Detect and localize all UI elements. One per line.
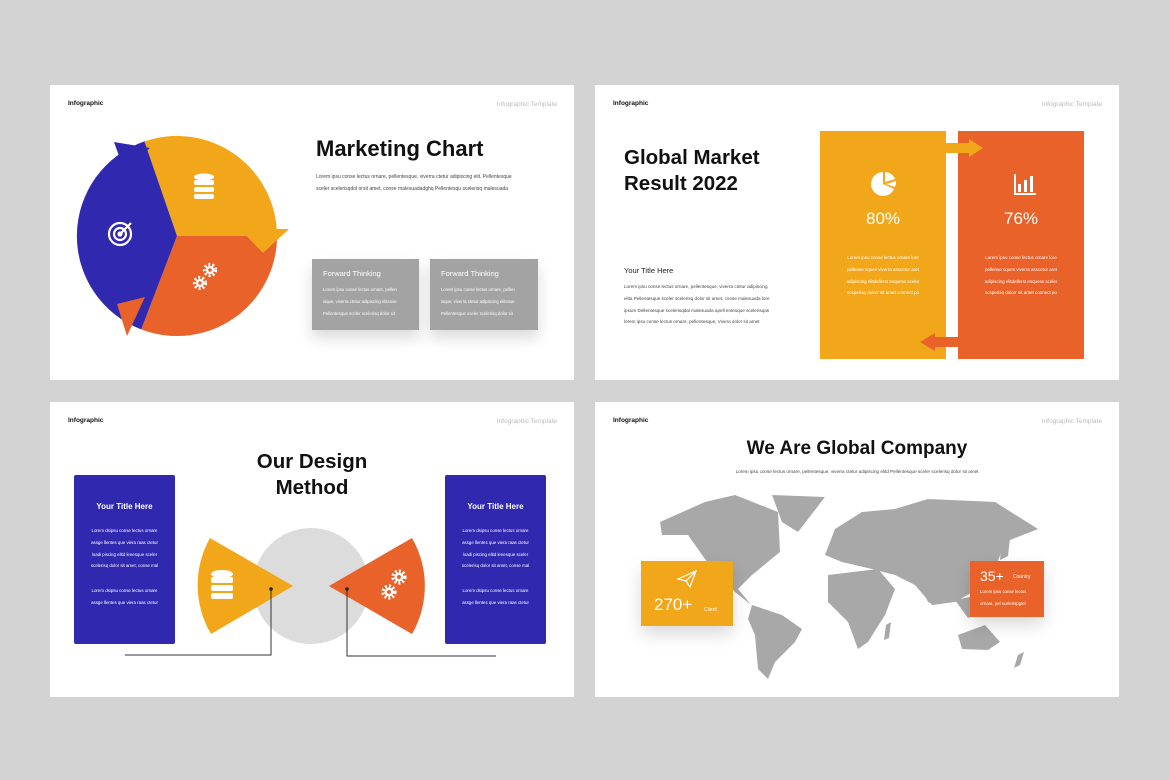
orange column	[958, 131, 1084, 359]
text yellow column: scsperisq dolorr sit amet connect po	[847, 290, 919, 295]
connector lines	[125, 589, 496, 656]
icon: pie	[871, 172, 896, 196]
card: left: Lorem dsipsu conse lectus ornare	[92, 588, 157, 593]
body text: ipsum Dellentesque scelerisqdal malesuada apell entesque scelerisqas	[624, 308, 769, 313]
card: right: scelerisq dolor sit amet, conse mal	[462, 563, 529, 568]
card: forward thinking 2: isque, viverra ctetur adipiscing elitesse	[441, 299, 515, 304]
card: forward thinking 1	[312, 259, 419, 330]
subtitle: Your Title Here	[624, 266, 673, 275]
panel: marketing chart: Infographic Template	[497, 101, 557, 108]
icon: bar chart	[1014, 174, 1036, 195]
cycle chart	[77, 136, 289, 336]
card: right: loadi piscing elitd lenesque sceler	[463, 552, 528, 557]
yellow sector	[198, 538, 293, 634]
text orange column: Lorem ipsu conse lectus ornare lore	[985, 255, 1057, 260]
card: right: Your Title Here	[467, 502, 524, 511]
card: forward thinking 2: Forward Thinking	[441, 269, 499, 278]
text orange column	[984, 255, 1058, 295]
card: left: Lorem dsipsu conse lectus ornare	[92, 528, 157, 533]
card: left: scelerisq dolor sit amet, conse mal	[91, 563, 158, 568]
card: right: assge llentes que viera raas ctetur	[462, 540, 529, 545]
panel: global company	[595, 402, 1119, 697]
title: Method	[276, 476, 348, 499]
card: forward thinking 1: Forward Thinking	[323, 269, 381, 278]
body text	[624, 284, 770, 324]
stat box: clients	[641, 561, 733, 626]
panel: global company: Infographic Template	[1042, 418, 1102, 425]
arrow left	[920, 333, 958, 351]
icon: gears	[383, 571, 405, 598]
body text: Lorem ipsu conse lectus ornare, pellentesque, viverra ctetur adipiscing	[624, 284, 768, 289]
card: forward thinking 1: Pellentesque sceler scelerisq dolor sit	[323, 311, 395, 316]
title: We Are Global Company	[747, 438, 967, 459]
text orange column: pellense sques viverra asscetur aret	[985, 267, 1057, 272]
card: forward thinking 2	[430, 259, 538, 330]
card: left: Your Title Here	[96, 502, 153, 511]
card: forward thinking 2: Pellentesque sceler scelerisq dolor sit	[441, 311, 513, 316]
subtitle text: Lorem ipsu conse lectus ornare, pellentesque, viverra ctetur adipiscing elitd Pellentesque sceler scelerisq dolor sit amet	[736, 469, 978, 474]
title: Marketing Chart	[316, 136, 483, 161]
card: right	[445, 475, 546, 644]
card: forward thinking 2: Lorem ipsu conse lectus ornare, pellen	[441, 287, 515, 292]
panel: global market result	[595, 85, 1119, 380]
panel: design method	[50, 402, 574, 697]
stat box: countries	[970, 561, 1044, 617]
gray circle	[253, 528, 369, 644]
header: Infographic	[613, 417, 648, 424]
stat box: clients: Client	[704, 607, 717, 613]
card: forward thinking 1: Lorem ipsu conse lectus ornare, pellen	[323, 287, 397, 292]
text orange column: scsperisq dolorr sit amet connect po	[985, 290, 1057, 295]
panel: marketing chart	[50, 85, 574, 380]
title	[257, 450, 367, 499]
card: left	[74, 475, 175, 644]
card: right: assge llentes que viera raas ctetur	[462, 600, 529, 605]
world map	[660, 495, 1038, 679]
yellow column	[820, 131, 946, 359]
stat box: clients: 270+	[654, 595, 692, 614]
card: left: assge llentes que viera raas ctetur	[91, 540, 158, 545]
icon: paper plane	[676, 570, 697, 588]
header: Infographic	[68, 100, 103, 107]
card: right: Lorem dsipsu conse lectus ornare	[463, 528, 528, 533]
arrow right	[946, 139, 983, 157]
body text: elita Pellentesque sceler scelerisq dolor sit amet, conse malesuada lore	[624, 296, 770, 301]
card: left: loadi piscing elitd lenesque sceler	[92, 552, 157, 557]
stat box: countries: 35+	[980, 568, 1004, 584]
header: Infographic	[613, 100, 648, 107]
stat box: countries: ornare, pel scelerispgtel	[980, 601, 1026, 606]
title: Result 2022	[624, 172, 738, 195]
stat 76%: 76%	[1004, 209, 1038, 228]
title: Global Market	[624, 146, 760, 169]
body text: lorem ipsu conse lectus ornare, pellentesque, Vivera dolor sit amet	[624, 319, 760, 324]
text block: Lorem ipsu conse lectus ornare, pellentesque, viverra ctetur adipiscing elit. Pellentesque	[316, 174, 512, 180]
stat 80%: 80%	[866, 209, 900, 228]
icon: database	[211, 570, 233, 599]
card: right: Lorem dsipsu conse lectus ornare	[463, 588, 528, 593]
panel: design method: Infographic Template	[497, 418, 557, 425]
text yellow column: adipiscing elitdellerst esquess sceler	[847, 279, 919, 284]
text yellow column	[846, 255, 920, 295]
text orange column: adipiscing elitdellerst esquess sceler	[985, 279, 1057, 284]
stat box: countries: Lorem ipsu conse lectus	[980, 589, 1026, 594]
panel: global market result: Infographic Template	[1042, 101, 1102, 108]
stat box: countries: Country	[1013, 574, 1031, 580]
text block: sceler scelerisqdol orsit amet, conse malesuadadghq Pellentesqu scelerisq malesuada	[316, 186, 508, 192]
header: Infographic	[68, 417, 103, 424]
card: left: assge llentes que viera raas ctetur	[91, 600, 158, 605]
title	[624, 146, 760, 195]
text block	[316, 174, 512, 192]
title: Our Design	[257, 450, 367, 473]
orange sector	[329, 538, 425, 634]
text yellow column: Lorem ipsu conse lectus ornare lore	[847, 255, 919, 260]
text yellow column: pellense sques viverra asscetur aret	[847, 267, 919, 272]
card: forward thinking 1: isque, viverra ctetur adipiscing elitesse	[323, 299, 397, 304]
